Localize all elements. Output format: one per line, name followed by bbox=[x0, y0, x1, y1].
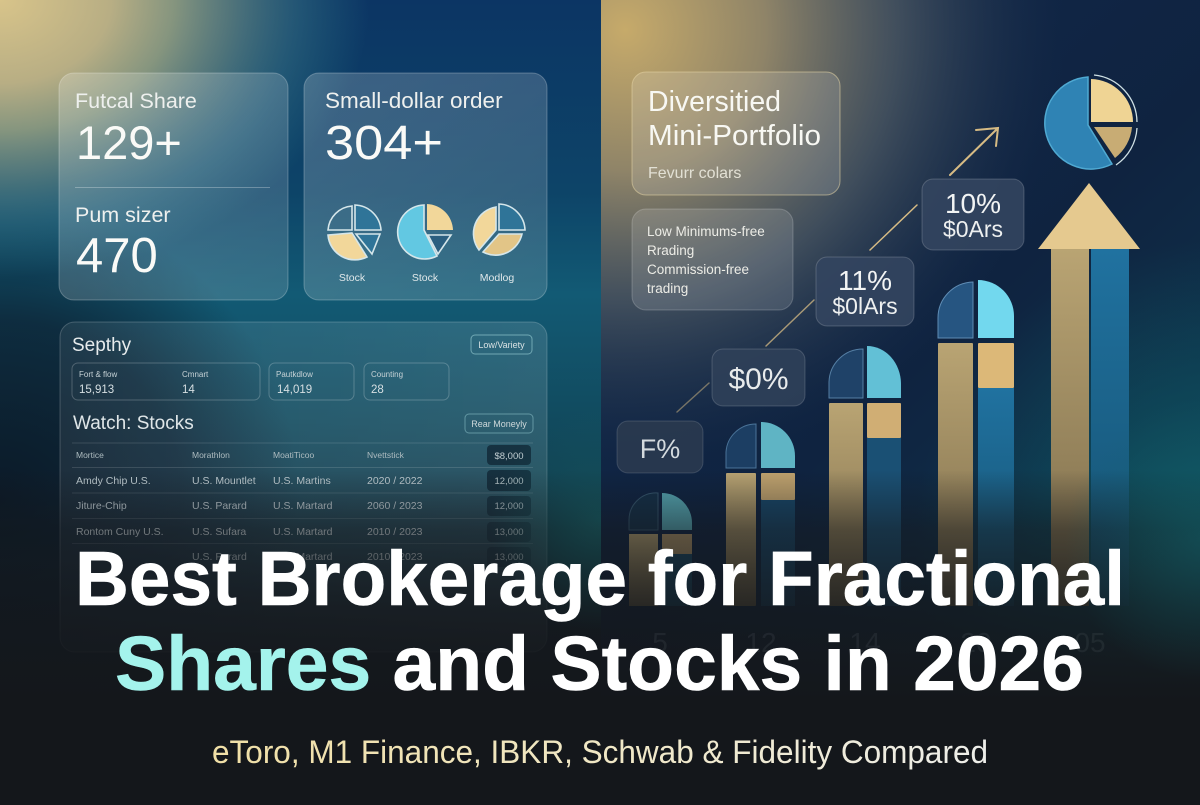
table: stock rows: MoatiTicoo bbox=[273, 450, 315, 460]
caption: Fevurr colars: Fevurr colars bbox=[648, 165, 741, 182]
bar 1 bbox=[629, 493, 692, 606]
table: stock rows: U.S. Martard bbox=[273, 551, 333, 563]
table: stock rows bbox=[72, 442, 533, 567]
table: stock rows: U.S. Martins bbox=[273, 475, 331, 487]
badge: 10%: 10% bbox=[945, 188, 1001, 219]
table: stock rows: 12,000 bbox=[494, 476, 524, 487]
badge: $0%: $0% bbox=[728, 363, 789, 396]
faint axis numbers: 12 bbox=[745, 627, 777, 658]
icon: large pie chart bbox=[1045, 75, 1137, 169]
title: Best Brokerage for Fractional bbox=[75, 536, 1125, 622]
table: stock rows: Jiture-Chip bbox=[76, 500, 127, 512]
badge: $0% bbox=[712, 349, 805, 406]
table: stock rows: Rontom Cuny U.S. bbox=[76, 526, 164, 538]
stat card: portfolio and count: Cmnart bbox=[182, 370, 209, 379]
badge: 10%: $0Ars bbox=[943, 216, 1003, 242]
stat card: position value: 14,019 bbox=[277, 384, 312, 396]
stat card: counting: 28 bbox=[371, 384, 384, 396]
icon: pie chart three bbox=[473, 204, 525, 255]
background: right half bbox=[601, 0, 1200, 805]
table: stock rows: 13,000 bbox=[494, 552, 524, 563]
bar 3 bbox=[829, 346, 901, 606]
stat card: portfolio and count: 14 bbox=[182, 384, 195, 396]
heading: Diversitied Mini-Portfolio bbox=[648, 86, 821, 152]
label: Stock: Stock bbox=[412, 272, 439, 284]
stat card: counting bbox=[364, 363, 449, 400]
stat: 129+: 129+ bbox=[76, 116, 182, 169]
table: stock rows: U.S. Mountlet bbox=[192, 475, 256, 487]
faint axis numbers: 05 bbox=[1074, 627, 1106, 658]
table: stock rows: Amdy Chip U.S. bbox=[76, 475, 151, 487]
icon: pie chart two bbox=[398, 204, 453, 259]
faint axis numbers: 20 bbox=[960, 627, 992, 658]
panel: diversified mini-portfolio bbox=[632, 72, 840, 195]
subtitle: eToro, M1 Finance, IBKR, Schwab & Fidelity Compared bbox=[212, 734, 988, 770]
chart: growing bars bbox=[629, 183, 1140, 606]
table: stock rows: 13,000 bbox=[494, 527, 524, 538]
button: Low/Variety: Low/Variety bbox=[478, 340, 525, 350]
table: stock rows: 2010 / 2023 bbox=[367, 551, 423, 563]
table: stock rows: U.S. Parard bbox=[192, 500, 247, 512]
bar 2 bbox=[726, 422, 795, 606]
stat: 304+: 304+ bbox=[325, 117, 443, 170]
title bbox=[75, 536, 1125, 707]
stat card: portfolio and count: 15,913 bbox=[79, 384, 114, 396]
bar 4 bbox=[938, 280, 1014, 606]
label: Pum sizer: Pum sizer bbox=[75, 203, 171, 227]
title: Shares and Stocks in 2026 bbox=[115, 621, 1084, 707]
heading: Watch: Stocks: Watch: Stocks bbox=[73, 413, 194, 434]
badge: 11% bbox=[816, 257, 914, 326]
table: stock rows: 12,000 bbox=[494, 501, 524, 512]
table: stock rows: 2020 / 2022 bbox=[367, 475, 423, 487]
panel: small-dollar order bbox=[304, 73, 547, 300]
stat card: counting: Counting bbox=[371, 370, 403, 379]
heading: Septhy: Septhy bbox=[72, 335, 132, 356]
panel: low minimums: Rrading bbox=[647, 243, 694, 258]
badge: F% bbox=[617, 421, 703, 473]
label: Futcal Share: Futcal Share bbox=[75, 89, 197, 113]
table: stock rows: Nvettstick bbox=[367, 450, 405, 460]
button: Rear Moneyly: Rear Moneyly bbox=[471, 419, 527, 429]
bar 5 with arrowhead bbox=[1038, 183, 1140, 606]
badge: 10% bbox=[922, 179, 1024, 250]
table: stock rows: Mortice bbox=[76, 450, 104, 460]
stat: 470: 470 bbox=[76, 229, 158, 283]
label: Stock: Stock bbox=[339, 272, 366, 284]
badge: F%: F% bbox=[640, 434, 680, 464]
table: stock rows: 2010 / 2023 bbox=[367, 526, 423, 538]
table: stock rows: U.S. Sufara bbox=[192, 526, 246, 538]
panel: watchlist table bbox=[60, 322, 547, 652]
stat card: position value: Pautkdlow bbox=[276, 370, 313, 379]
table: stock rows: 2060 / 2023 bbox=[367, 500, 423, 512]
heading: Diversitied Mini-Portfolio: Mini-Portfolio bbox=[648, 120, 821, 152]
stat card: portfolio and count: Fort & flow bbox=[79, 370, 117, 379]
button: Low/Variety bbox=[471, 335, 532, 354]
table: stock rows: $8,000 bbox=[494, 451, 524, 462]
stat card: position value bbox=[269, 363, 354, 400]
panel: fractional share stats bbox=[59, 73, 288, 300]
panel: low minimums: Commission-free bbox=[647, 262, 749, 277]
panel: low minimums: Low Minimums-free bbox=[647, 224, 765, 239]
icon: pie chart one bbox=[328, 205, 381, 260]
badge: 11%: $0lArs bbox=[832, 293, 898, 319]
panel: low minimums: trading bbox=[647, 281, 688, 296]
heading: Diversitied Mini-Portfolio: Diversitied bbox=[648, 86, 781, 118]
button: Rear Moneyly bbox=[465, 414, 533, 433]
table: stock rows: Morathlon bbox=[192, 450, 230, 460]
stat card: portfolio and count bbox=[72, 363, 260, 400]
faint axis numbers: 5 bbox=[652, 627, 668, 658]
faint axis numbers: 14 bbox=[849, 627, 881, 658]
teal glows above the fade bbox=[1050, 390, 1200, 690]
table: stock rows: U.S. Martard bbox=[273, 526, 333, 538]
bottom fade overlay bbox=[0, 470, 1200, 805]
label: Small-dollar order: Small-dollar order bbox=[325, 88, 503, 113]
label: Modlog: Modlog bbox=[480, 272, 514, 284]
trend arrow line bbox=[677, 128, 998, 412]
panel: low minimums bbox=[632, 209, 793, 310]
background: left half bbox=[0, 0, 601, 805]
table: stock rows: U.S. Parard bbox=[192, 551, 247, 563]
table: stock rows: U.S. Martard bbox=[273, 500, 333, 512]
badge: 11%: 11% bbox=[838, 265, 892, 296]
faint axis numbers bbox=[652, 627, 1106, 658]
